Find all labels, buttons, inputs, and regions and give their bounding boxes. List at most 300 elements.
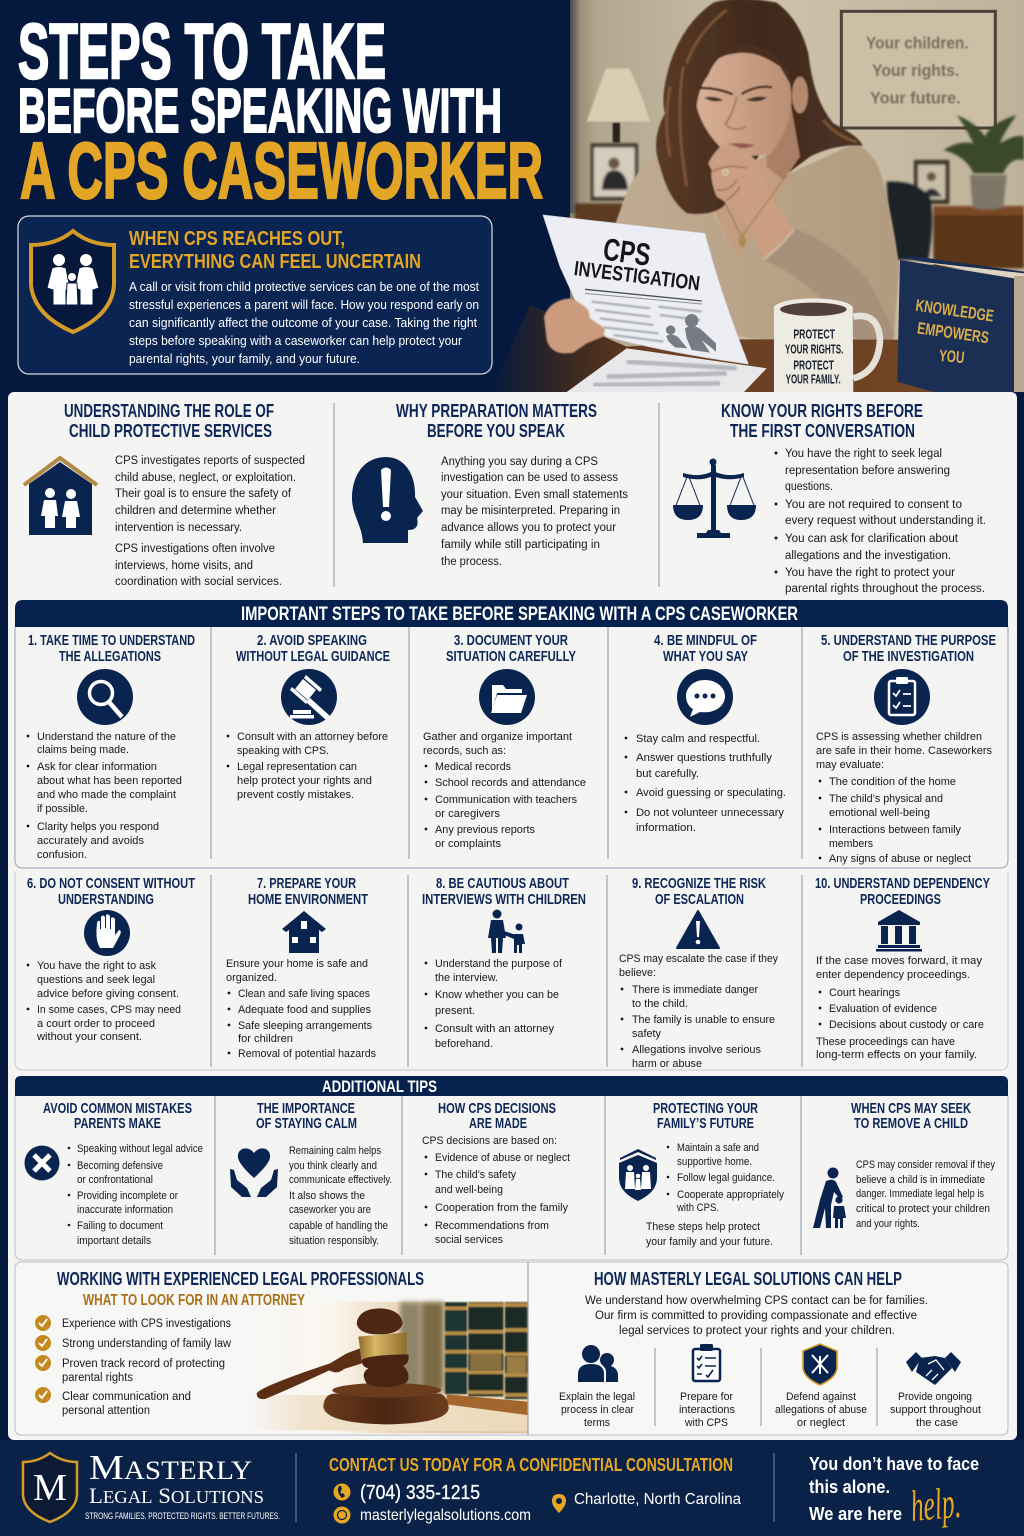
panel: how Masterly Legal Solutions can help [559,1268,981,1429]
step text [27,731,182,861]
step text: These proceedings can have [816,1036,955,1048]
heading: CHILD PROTECTIVE SERVICES [69,420,272,441]
text block: Their goal is to ensure the safety of [115,488,292,500]
hero photo: worried mother reading CPS letter [490,0,1024,392]
icon: home [282,911,326,953]
sweater [615,143,899,358]
tip: how decisions are made [422,1100,570,1246]
step text: Know whether you can be [435,989,559,1001]
tip text: critical to protect your children [856,1203,990,1215]
tip text: and your rights. [856,1218,920,1230]
step 5 [816,632,996,865]
step text: Allegations involve serious [632,1044,762,1056]
tip text [422,1135,570,1246]
text block: allegations and the investigation. [785,550,951,562]
icon: scales of justice [673,458,756,538]
icon: location pin [552,1494,566,1513]
heading: UNDERSTANDING THE ROLE OF [64,400,274,421]
step text: believe: [619,967,656,979]
heading [396,400,597,441]
step text: present. [435,1005,475,1017]
tip: protecting your family's future [619,1100,785,1248]
title [18,7,543,215]
service: ongoing support [890,1352,981,1429]
step heading: UNDERSTANDING [58,891,154,908]
checklist: Proven track record of protecting [62,1358,225,1370]
step 7 [226,875,377,1060]
text block: children and determine whether [115,505,276,517]
icon: web [334,1506,350,1524]
title: A CPS CASEWORKER [20,126,543,215]
tip: staying calm [230,1100,392,1247]
book: knowledge empowers you [897,257,1024,392]
mug [774,298,880,392]
step text: to the child. [632,998,688,1010]
checklist: Experience with CPS investigations [62,1318,231,1330]
callout heading: EVERYTHING CAN FEEL UNCERTAIN [129,251,421,273]
step text: In some cases, CPS may need [37,1004,181,1016]
heading: BEFORE YOU SPEAK [427,420,565,441]
step text: Medical records [435,761,512,773]
step text: long-term effects on your family. [816,1049,977,1061]
chest [710,153,792,258]
step text: the interview. [435,972,498,984]
step text: Safe sleeping arrangements [238,1020,373,1032]
gavel head [357,1308,403,1334]
step heading: THE ALLEGATIONS [59,648,161,665]
step text: a court order to proceed [37,1018,155,1030]
tip text: Recommendations from [435,1220,549,1232]
step heading: 3. DOCUMENT YOUR [454,632,568,649]
tip text: with CPS. [676,1202,719,1214]
step text: Understand the purpose of [435,958,563,970]
tip text [289,1145,392,1247]
tip text: social services [435,1234,504,1246]
step 2 [227,632,390,801]
step heading [236,632,390,665]
icon: folder [479,669,535,725]
callout heading: WHEN CPS REACHES OUT, [129,228,345,250]
text block: Our firm is committed to providing compassionate and effective [595,1310,917,1322]
icon: heart in hands [230,1148,278,1197]
text block: representation before answering [785,465,950,477]
service label: process in clear [561,1404,634,1416]
text block: advance allows you to protect your [441,522,616,534]
step text: confusion. [37,849,87,861]
step heading: 1. TAKE TIME TO UNDERSTAND [28,632,195,649]
service label [679,1391,735,1429]
sounding block [323,1394,449,1424]
tip text: Speaking without legal advice [77,1143,203,1155]
service label: the case [916,1417,958,1429]
checklist: Clear communication and [62,1391,191,1403]
tip heading: WHEN CPS MAY SEEK [851,1100,971,1117]
service: explain the legal process [559,1345,635,1429]
step text: The condition of the home [829,776,956,788]
step heading: WITHOUT LEGAL GUIDANCE [236,648,390,665]
tip text: inaccurate information [77,1204,173,1216]
service label [559,1391,635,1429]
tip heading: THE IMPORTANCE [257,1100,355,1117]
step 1 [27,632,195,861]
books on shelf [400,1302,443,1392]
section: ten important steps [15,600,1008,1070]
callout body: A call or visit from child protective services can be one of the most [129,279,479,294]
closing message: help. [909,1478,963,1531]
step text: Clarity helps you respond [37,821,159,833]
step text: may evaluate: [816,759,884,771]
tip text: Evidence of abuse or neglect [435,1152,570,1164]
text block: your situation. Even small statements [441,489,628,501]
heading: WORKING WITH EXPERIENCED LEGAL PROFESSIONALS [57,1268,424,1289]
footer [0,1440,1024,1536]
tip heading: HOW CPS DECISIONS [438,1100,556,1117]
text block: Anything you say during a CPS [441,456,598,468]
logo wordmark: MASTERLY [89,1448,252,1487]
tip text: believe a child is in immediate [856,1174,985,1186]
contact block [329,1455,741,1524]
tip text: caseworker you are [289,1204,371,1216]
step text: Consult with an attorney before [237,731,388,743]
icon: phone [334,1484,350,1500]
service label [775,1391,867,1429]
logo [23,1448,280,1522]
step text: safety [632,1028,662,1040]
service: defend against allegations [775,1344,867,1429]
tip heading [43,1100,192,1132]
step heading: INTERVIEWS WITH CHILDREN [422,891,586,908]
book: knowledge empowers you: KNOWLEDGE [914,296,995,326]
step heading: 2. AVOID SPEAKING [257,632,367,649]
step heading [422,875,586,908]
service label: interactions [679,1404,735,1416]
text block: every request without understanding it. [785,515,986,527]
step heading: WHAT YOU SAY [663,648,748,665]
face [697,47,791,157]
callout body [129,279,479,366]
subheading: WHAT TO LOOK FOR IN AN ATTORNEY [83,1292,305,1309]
tip text: situation responsibly. [289,1235,379,1247]
step heading [654,632,757,665]
tip: when CPS may remove a child [813,1100,996,1230]
step heading [815,875,990,908]
step text: Stay calm and respectful. [636,733,760,745]
step text: advice before giving consent. [37,988,179,1000]
step text [816,955,984,1061]
banner heading [15,600,1008,627]
title: BEFORE SPEAKING WITH [18,77,502,146]
step text: if possible. [37,803,88,815]
text block: CPS investigates reports of suspected [115,455,305,467]
tip text: Becoming defensive [77,1160,163,1172]
text block [441,456,628,568]
callout body: can significantly affect the outcome of your case. Taking the right [129,315,477,330]
callout body: parental rights, your family, and your future. [129,351,360,366]
tip text: Cooperation from the family [435,1202,569,1214]
tip text: Follow legal guidance. [677,1172,775,1184]
step text [425,958,563,1050]
step text: emotional well-being [829,807,930,819]
necklace [725,175,787,237]
text block: family while still participating in [441,539,600,551]
step 4 [625,632,786,834]
hand holding paper [544,298,605,353]
service label: Explain the legal [559,1391,635,1403]
hand on chin [708,143,794,258]
step 9 [619,875,779,1070]
checklist: personal attention [62,1405,150,1417]
step 8 [422,875,586,1050]
step text: speaking with CPS. [237,745,329,757]
step text: are safe in their home. Caseworkers [816,745,993,757]
heading: THE FIRST CONVERSATION [730,420,915,441]
step 6 [27,875,195,1043]
logo shield: M [33,1467,67,1509]
tip heading: ARE MADE [469,1115,527,1132]
text block: legal services to protect your rights and your children. [619,1325,895,1337]
lamp [587,68,650,143]
step text: You have the right to ask [37,960,157,972]
contact block: (704) 335-1215 [360,1482,480,1504]
step text: enter dependency proceedings. [816,969,970,981]
step text [423,731,586,850]
tip heading [851,1100,971,1132]
step text: organized. [226,972,277,984]
tip text [856,1159,996,1230]
step text: for children [238,1033,293,1045]
callout heading [129,228,421,273]
tip text [68,1143,203,1247]
text block: You are not required to consent to [785,499,962,511]
contact block: Charlotte, North Carolina [574,1491,741,1508]
service label: Provide ongoing [898,1391,972,1403]
woman [615,0,899,358]
step text: beforehand. [435,1038,493,1050]
tip text: capable of handling the [289,1220,388,1232]
column: why preparation matters [352,400,628,568]
step text: Evaluation of evidence [829,1003,937,1015]
tip heading: TO REMOVE A CHILD [854,1115,968,1132]
contact block: masterlylegalsolutions.com [360,1507,531,1524]
step heading: HOME ENVIRONMENT [248,891,368,908]
tip heading: PROTECTING YOUR [653,1100,758,1117]
step text: Do not volunteer unnecessary [636,807,785,819]
framed photos, plant and furniture [575,115,1024,268]
callout body: stressful experiences a parent will face. How you respond early on [129,297,479,312]
tip heading: AVOID COMMON MISTAKES [43,1100,192,1117]
tip text: These steps help protect [646,1221,760,1233]
wall poster: Your rights. [872,61,959,80]
step heading [27,875,195,908]
mug: PROTECT [793,327,835,342]
service label: or neglect [797,1417,845,1429]
step heading: PROCEEDINGS [860,891,941,908]
heading: HOW MASTERLY LEGAL SOLUTIONS CAN HELP [594,1268,902,1289]
column: understanding the role of CPS [24,400,305,588]
step heading: OF THE INVESTIGATION [843,648,974,665]
tip text: important details [77,1235,152,1247]
tip text: Failing to document [77,1220,163,1232]
icon: adult reaching to child [813,1168,846,1228]
icon: courthouse [876,910,922,952]
icon: speech bubble [677,669,733,725]
tip text: Cooperate appropriately [677,1189,785,1201]
tip text: your family and your future. [646,1236,773,1248]
text block: may be misinterpreted. Preparing in [441,505,620,517]
CPS investigation paper [543,215,748,364]
step text: information. [636,822,696,834]
tip text: communicate effectively. [289,1174,392,1186]
step heading: OF ESCALATION [655,891,744,908]
step text: The child’s physical and [829,793,943,805]
panel: working with legal professionals [35,1268,527,1433]
step heading: SITUATION CAREFULLY [446,648,576,665]
tip text: CPS decisions are based on: [422,1135,557,1147]
step text: records, such as: [423,745,506,757]
step 3 [423,632,586,850]
step text [27,960,181,1043]
text block [585,1295,928,1337]
banner heading: ADDITIONAL TIPS [322,1077,437,1096]
closing message: We are here [809,1504,902,1524]
step heading [821,632,996,665]
checklist: Strong understanding of family law [62,1338,232,1350]
book: knowledge empowers you: EMPOWERS [916,318,990,347]
tip text: The child’s safety [435,1169,517,1181]
wall poster [841,11,995,128]
CPS investigation paper: INVESTIGATION [573,257,701,295]
text block: We understand how overwhelming CPS contact can be for families. [585,1295,928,1307]
icon: home shield with family [619,1149,657,1201]
step text: Clean and safe living spaces [238,988,371,1000]
step text: CPS is assessing whether children [816,731,982,743]
tip heading: PARENTS MAKE [74,1115,161,1132]
step heading [248,875,368,908]
tip heading: FAMILY’S FUTURE [657,1115,754,1132]
callout body: steps before speaking with a caseworker can help protect your [129,333,463,348]
step text [227,731,388,801]
closing message: You don’t have to face [809,1454,979,1474]
step text: There is immediate danger [632,984,758,996]
step text: The family is unable to ensure [632,1014,775,1026]
text block: You can ask for clarification about [785,533,959,545]
step text: Court hearings [829,987,901,999]
service: prepare for interactions [679,1344,735,1429]
checklist: parental rights [62,1372,133,1384]
step heading [446,632,576,665]
step text: Consult with an attorney [435,1023,555,1035]
tip text: supportive home. [677,1156,752,1168]
logo wordmark: STRONG FAMILIES. PROTECTED RIGHTS. BETTER FUTURES. [85,1511,280,1521]
tip text: Maintain a safe and [677,1142,759,1154]
icon: warning triangle [677,911,719,948]
step heading: 9. RECOGNIZE THE RISK [632,875,766,892]
tip text: Remaining calm helps [289,1145,382,1157]
banner heading [15,1076,1008,1096]
closing message: this alone. [809,1477,890,1497]
service label: allegations of abuse [775,1404,867,1416]
tip text [646,1142,785,1248]
tip text: danger. Immediate legal help is [856,1188,985,1200]
heading [721,400,923,441]
service label: Prepare for [680,1391,733,1403]
step heading [632,875,766,908]
tip text: and well-being [435,1184,503,1196]
ear and neck [792,77,808,113]
text block: the process. [441,556,502,568]
tip: avoid common mistakes [24,1100,203,1247]
icon: gavel [281,669,337,725]
step 10 [815,875,990,1061]
text block: interviews, home visits, and [115,560,253,572]
step heading: 8. BE CAUTIOUS ABOUT [436,875,569,892]
step text: help protect your rights and [237,775,372,787]
gavel handle [257,1348,362,1399]
step text: Adequate food and supplies [238,1004,372,1016]
mug: PROTECT [793,357,834,372]
step text: Removal of potential hazards [238,1048,377,1060]
hair back [656,0,863,214]
contact block: CONTACT US TODAY FOR A CONFIDENTIAL CONSULTATION [329,1455,733,1475]
second paper on desk [567,348,767,392]
gavel photo [250,1302,527,1433]
step text: Any previous reports [435,824,536,836]
step text: accurately and avoids [37,835,145,847]
text block: CPS investigations often involve [115,543,275,555]
step text [226,958,377,1060]
icon: parent and child [488,910,525,953]
text block: You have the right to seek legal [785,448,942,460]
step text: Decisions about custody or care [829,1019,984,1031]
step text: Communication with teachers [435,794,578,806]
tip heading [438,1100,556,1132]
icon: clipboard [693,1344,720,1381]
section: additional tips [15,1076,1008,1260]
icon: stop hand [84,910,130,956]
step text: CPS may escalate the case if they [619,953,779,965]
step text: Gather and organize important [423,731,572,743]
icon: people [578,1345,618,1382]
step heading: 6. DO NOT CONSENT WITHOUT [27,875,195,892]
tip heading: OF STAYING CALM [256,1115,357,1132]
step heading: 4. BE MINDFUL OF [654,632,757,649]
icon: house with family [24,458,97,535]
service label: terms [584,1417,610,1429]
step text: Answer questions truthfully [636,752,773,764]
mug: YOUR FAMILY. [786,371,841,386]
icon: magnifying glass [77,669,133,725]
step text: or complaints [435,838,502,850]
main white panel [8,392,1017,1440]
service label [890,1391,981,1429]
text block [115,455,305,588]
CPS investigation paper: CPS [601,232,653,273]
text block: coordination with social services. [115,576,282,588]
tip text: or confrontational [77,1174,153,1186]
step text: Interactions between family [829,824,962,836]
intro callout box [18,216,492,374]
icon: shield with scales [803,1344,837,1385]
banner heading: IMPORTANT STEPS TO TAKE BEFORE SPEAKING WITH A CPS CASEWORKER [241,604,798,625]
service label: with CPS [684,1417,728,1429]
step text: claims being made. [37,744,129,756]
step text [816,731,993,865]
step text: Avoid guessing or speculating. [636,787,786,799]
wall poster: Your children. [866,34,969,53]
step text: members [829,838,874,850]
step text: Understand the nature of the [37,731,176,743]
tip text: you think clearly and [289,1160,377,1172]
